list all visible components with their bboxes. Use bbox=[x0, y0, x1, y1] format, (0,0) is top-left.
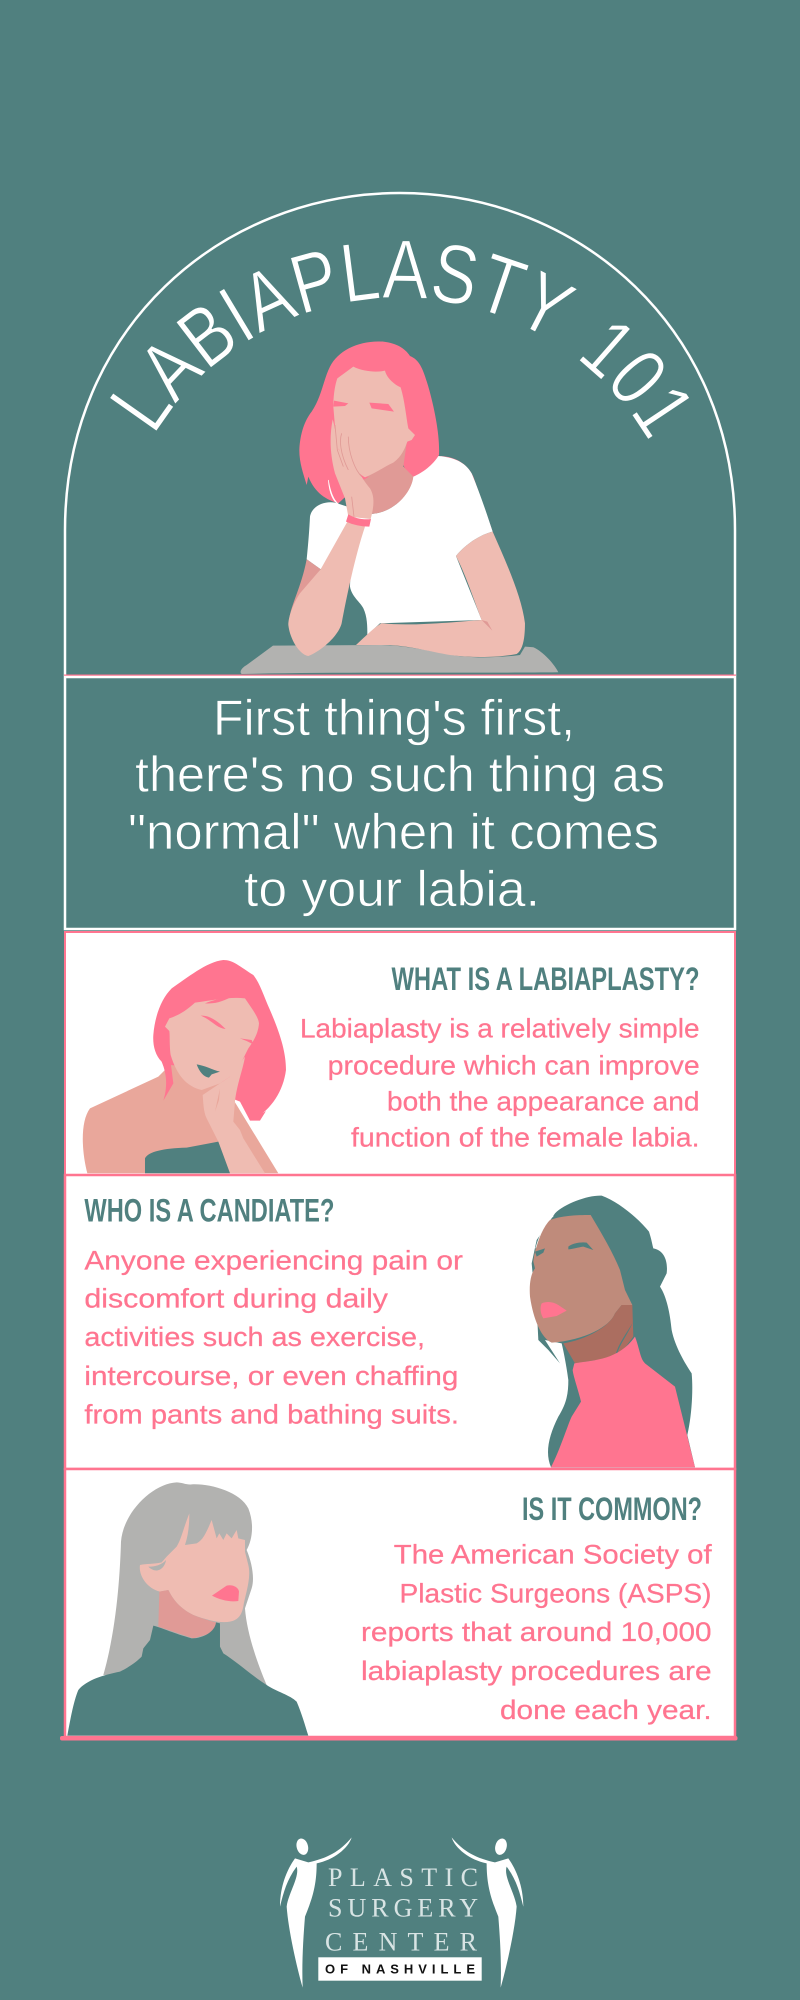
body text: Plastic Surgeons (ASPS) bbox=[400, 1578, 712, 1608]
intro text: to your labia. bbox=[244, 861, 540, 917]
intro text: "normal" when it comes bbox=[128, 804, 659, 860]
panel: who is a candidate bbox=[65, 1175, 735, 1469]
panel: is it common bbox=[65, 1469, 735, 1737]
pink bottom rule bbox=[60, 1736, 738, 1740]
intro text: First thing's first, bbox=[213, 690, 575, 746]
body text: Labiaplasty is a relatively simple bbox=[300, 1014, 700, 1044]
logo bbox=[280, 1837, 523, 1988]
logo tag: OF NASHVILLE bbox=[325, 1962, 475, 1976]
pink divider under arch bbox=[64, 674, 736, 678]
body text: from pants and bathing suits. bbox=[84, 1399, 459, 1429]
illustration: woman with pink bob bbox=[83, 960, 286, 1173]
logo figures bbox=[280, 1837, 523, 1988]
body text bbox=[361, 1539, 712, 1725]
title: LABIAPLASTY 101 bbox=[110, 241, 689, 439]
illustration: woman with grey hair bbox=[67, 1482, 308, 1736]
body text: function of the female labia. bbox=[351, 1123, 700, 1153]
body text bbox=[300, 1014, 700, 1153]
body text: discomfort during daily bbox=[84, 1283, 389, 1313]
heading: WHO IS A CANDIATE? bbox=[84, 1193, 334, 1229]
intro text bbox=[65, 677, 735, 929]
body text: procedure which can improve bbox=[328, 1050, 700, 1080]
heading: WHAT IS A LABIAPLASTY? bbox=[392, 961, 700, 997]
logo wordmark: SURGERY bbox=[328, 1894, 478, 1923]
body text bbox=[84, 1245, 463, 1429]
illustration: woman with pink hair resting chin on hand bbox=[241, 341, 558, 674]
body text: labiaplasty procedures are bbox=[361, 1656, 712, 1686]
panel: what is a labiaplasty bbox=[65, 932, 735, 1175]
body text: done each year. bbox=[500, 1695, 712, 1725]
body text: intercourse, or even chaffing bbox=[84, 1361, 458, 1391]
body text: reports that around 10,000 bbox=[361, 1617, 712, 1647]
logo wordmark bbox=[325, 1863, 478, 1957]
body text: both the appearance and bbox=[387, 1087, 700, 1117]
arch outline bbox=[65, 193, 735, 676]
body text: The American Society of bbox=[394, 1539, 712, 1569]
logo tag bbox=[318, 1957, 482, 1981]
logo wordmark: CENTER bbox=[325, 1928, 478, 1957]
heading: IS IT COMMON? bbox=[522, 1491, 702, 1527]
body text: activities such as exercise, bbox=[84, 1322, 425, 1352]
body text: Anyone experiencing pain or bbox=[84, 1245, 463, 1275]
intro text: there's no such thing as bbox=[135, 747, 665, 803]
logo wordmark: PLASTIC bbox=[328, 1863, 478, 1892]
illustration: woman with teal hair bbox=[530, 1196, 695, 1467]
